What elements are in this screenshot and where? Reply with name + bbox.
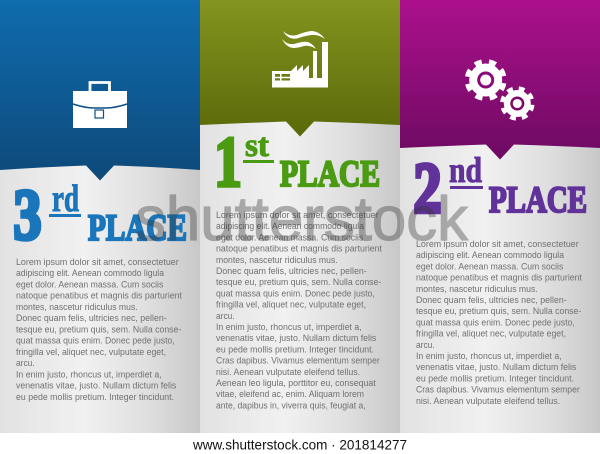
text block: second place: Lorem ipsum dolor sit amet, consectetuer <box>416 239 579 249</box>
text block: second place: natoque penatibus et magnis dis parturient <box>416 273 583 283</box>
text block: first place: ante, dapibus in, viverra quis, feugiat a, <box>216 400 366 410</box>
text block: third place: adipiscing elit. Aenean commodo ligula <box>16 268 164 278</box>
text block: third place: In enim justo, rhoncus ut, imperdiet a, <box>16 369 162 379</box>
text block: second place: In enim justo, rhoncus ut, imperdiet a, <box>416 351 562 361</box>
text block: first place: Aenean leo ligula, porttitor eu, consequat <box>216 378 376 388</box>
text block: second place: Cras dapibus. Vivamus elementum semper <box>416 385 580 395</box>
text block: first place: Lorem ipsum dolor sit amet, consectetuer <box>216 210 379 220</box>
text block: third place: tesque eu, pretium quis, sem. Nulla conse- <box>16 324 181 334</box>
text block: first place: tesque eu, pretium quis, sem. Nulla conse- <box>216 277 381 287</box>
text block: first place: vitae, eleifend ac, enim. Aliquam lorem <box>216 389 364 399</box>
text block: first place: fringilla vel, aliquet nec, vulputate eget, <box>216 300 366 310</box>
text block: second place: arcu. <box>416 340 435 350</box>
watermark: shutterstock <box>135 185 469 254</box>
text block: second place: eu pede mollis pretium. Integer tincidunt. <box>416 373 574 383</box>
text block: third place: venenatis vitae, justo. Nullam dictum felis <box>16 381 177 391</box>
heading: 1st place <box>214 122 380 202</box>
heading: 2nd place <box>414 148 587 228</box>
footer credit: www.shutterstock.com · 201814277 <box>192 436 407 452</box>
heading: 2nd place: 2 <box>414 148 442 228</box>
heading: 1st place: PLACE <box>280 154 380 195</box>
text block: second place: adipiscing elit. Aenean commodo ligula <box>416 250 564 260</box>
text block: third place: natoque penatibus et magnis dis parturient <box>16 291 183 301</box>
text block: third place: fringilla vel, aliquet nec, vulputate eget, <box>16 347 166 357</box>
icon: briefcase <box>73 82 127 128</box>
text block: first place: eu pede mollis pretium. Integer tincidunt. <box>216 344 374 354</box>
text block: second place: montes, nascetur ridiculus mus. <box>416 284 538 294</box>
text block: second place <box>416 239 583 406</box>
text block: second place: fringilla vel, aliquet nec, vulputate eget, <box>416 329 566 339</box>
heading: 3rd place: 3 <box>14 175 42 255</box>
heading: 3rd place: PLACE <box>88 208 187 249</box>
text block: second place: eget dolor. Aenean massa. Cum sociis <box>416 261 564 271</box>
icon: factory <box>272 31 328 88</box>
text block: third place: eget dolor. Aenean massa. Cum sociis <box>16 279 164 289</box>
text block: first place: quat massa quis enim. Donec pede justo, <box>216 288 375 298</box>
text block: second place: nisi. Aenean vulputate eleifend tellus. <box>416 396 560 406</box>
text block: first place: adipiscing elit. Aenean commodo ligula <box>216 221 364 231</box>
text block: first place: In enim justo, rhoncus ut, imperdiet a, <box>216 322 362 332</box>
panel: first place <box>200 0 400 433</box>
text block: first place: nisi. Aenean vulputate eleifend tellus. <box>216 367 360 377</box>
small gear <box>501 87 534 120</box>
heading: 2nd place: nd <box>449 150 482 190</box>
heading: 3rd place <box>14 175 187 255</box>
paper panel with notch <box>0 166 200 433</box>
text block: second place: venenatis vitae, justo. Nullam dictum felis <box>416 362 577 372</box>
header band: purple <box>400 0 600 162</box>
paper panel with notch <box>200 122 400 433</box>
text block: second place: Donec quam felis, ultricies nec, pellen- <box>416 295 567 305</box>
text block: first place: montes, nascetur ridiculus mus. <box>216 255 338 265</box>
text block: first place: eget dolor. Aenean massa. Cum sociis <box>216 232 364 242</box>
text block: third place: Lorem ipsum dolor sit amet, consectetuer <box>16 257 179 267</box>
paper panel with notch <box>400 144 600 433</box>
text block: first place: natoque penatibus et magnis dis parturient <box>216 244 383 254</box>
text block: first place <box>216 210 383 410</box>
text block: second place: quat massa quis enim. Donec pede justo, <box>416 317 575 327</box>
text block: third place: arcu. <box>16 358 35 368</box>
heading: 1st place: st <box>245 128 269 164</box>
header band: green <box>200 0 400 140</box>
text block: first place: Cras dapibus. Vivamus elementum semper <box>216 356 380 366</box>
text block: second place: tesque eu, pretium quis, sem. Nulla conse- <box>416 306 581 316</box>
text block: third place: montes, nascetur ridiculus mus. <box>16 302 138 312</box>
header band: blue <box>0 0 200 185</box>
heading: 3rd place: rd <box>52 178 79 220</box>
icon: gears <box>464 59 534 120</box>
text block: first place: arcu. <box>216 311 235 321</box>
text block: third place: quat massa quis enim. Donec pede justo, <box>16 336 175 346</box>
text block: third place: eu pede mollis pretium. Integer tincidunt. <box>16 392 174 402</box>
heading: 1st place: 1 <box>214 122 242 202</box>
text block: first place: Donec quam felis, ultricies nec, pellen- <box>216 266 367 276</box>
text block: third place <box>16 257 183 402</box>
text block: third place: Donec quam felis, ultricies nec, pellen- <box>16 313 167 323</box>
big gear <box>464 59 507 101</box>
panel: second place <box>400 0 600 433</box>
panel: third place <box>0 0 200 433</box>
text block: first place: venenatis vitae, justo. Nullam dictum felis <box>216 333 377 343</box>
